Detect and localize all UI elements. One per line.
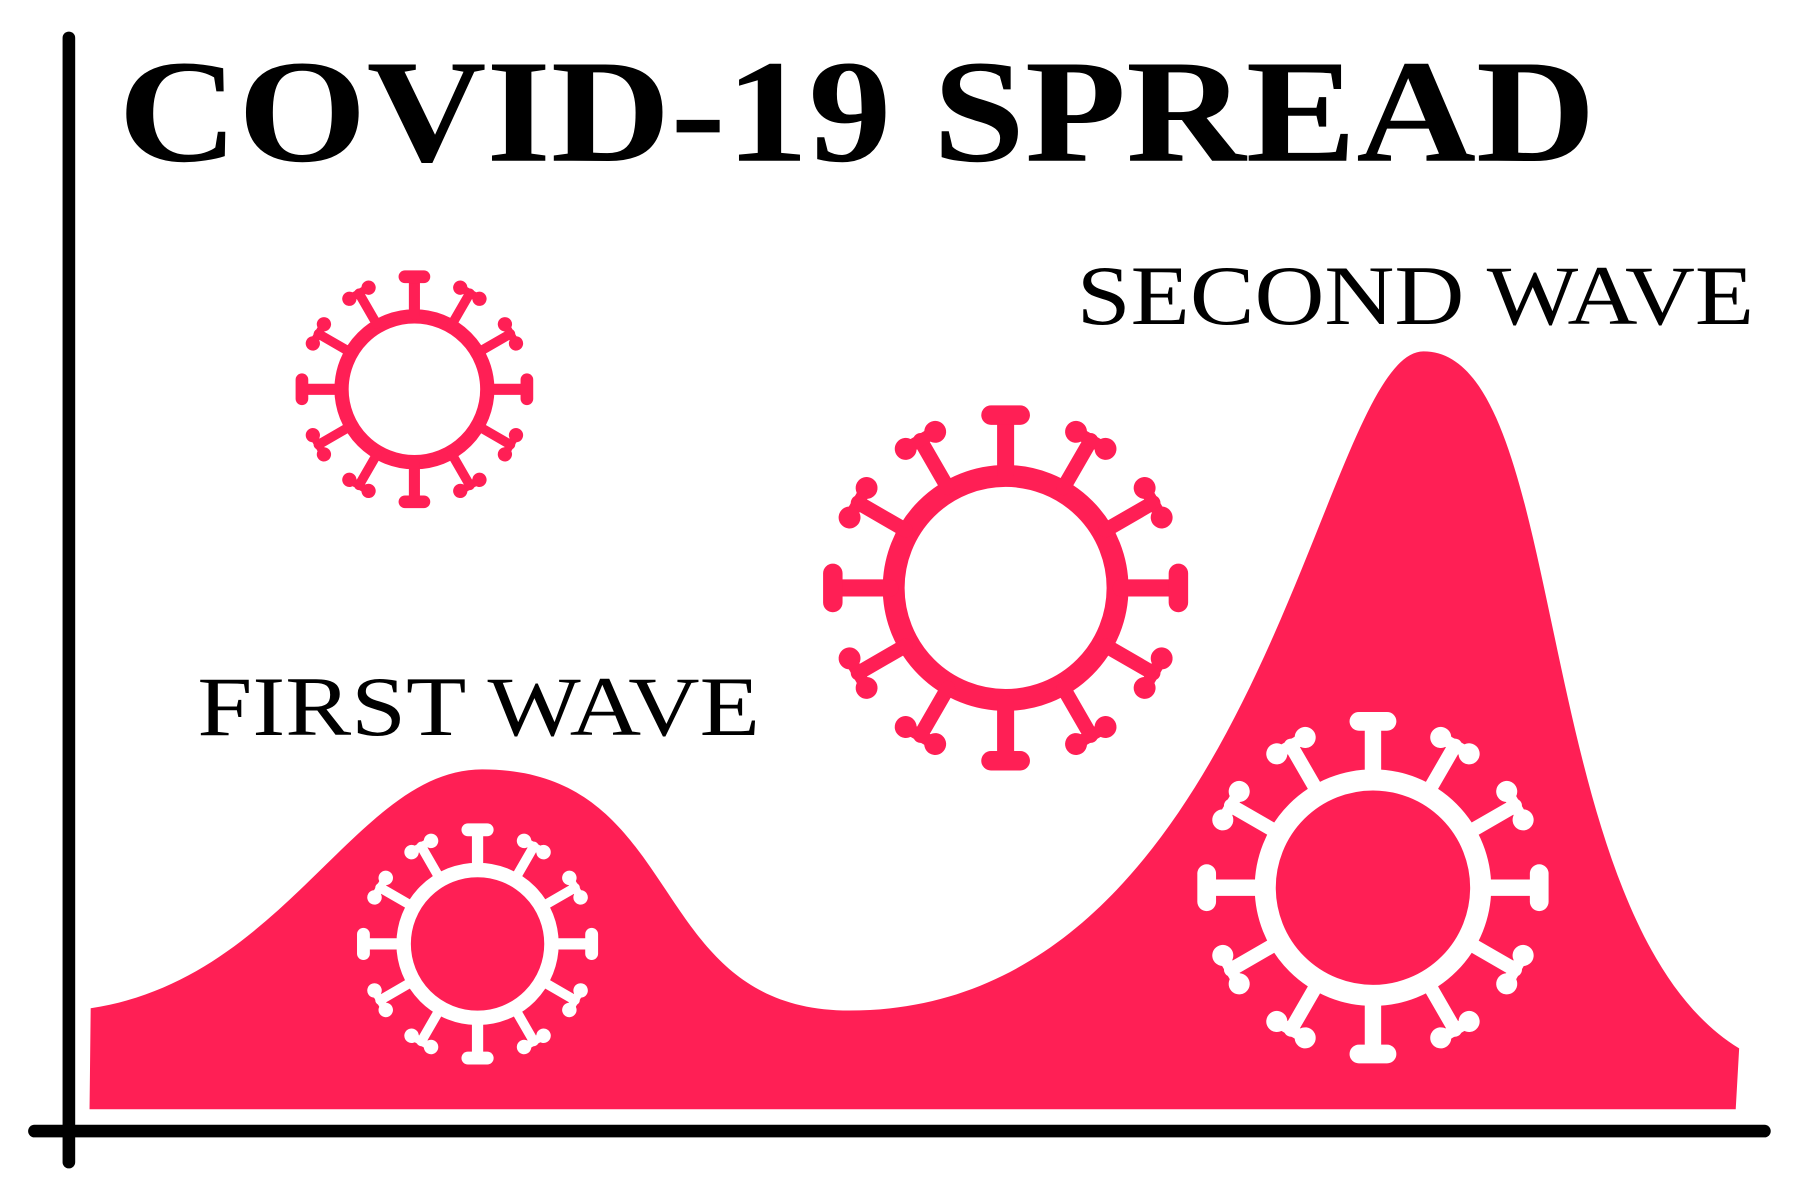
icon: white virus first wave	[363, 830, 592, 1058]
label: second wave: SECOND WAVE	[1077, 249, 1754, 343]
icon: large pink virus	[833, 415, 1178, 761]
label: first wave: FIRST WAVE	[197, 660, 760, 754]
title: COVID-19 SPREAD	[118, 30, 1596, 193]
icon: small pink virus	[302, 277, 527, 502]
icon: white virus second wave	[1207, 721, 1539, 1054]
area chart: waves	[90, 351, 1739, 1109]
